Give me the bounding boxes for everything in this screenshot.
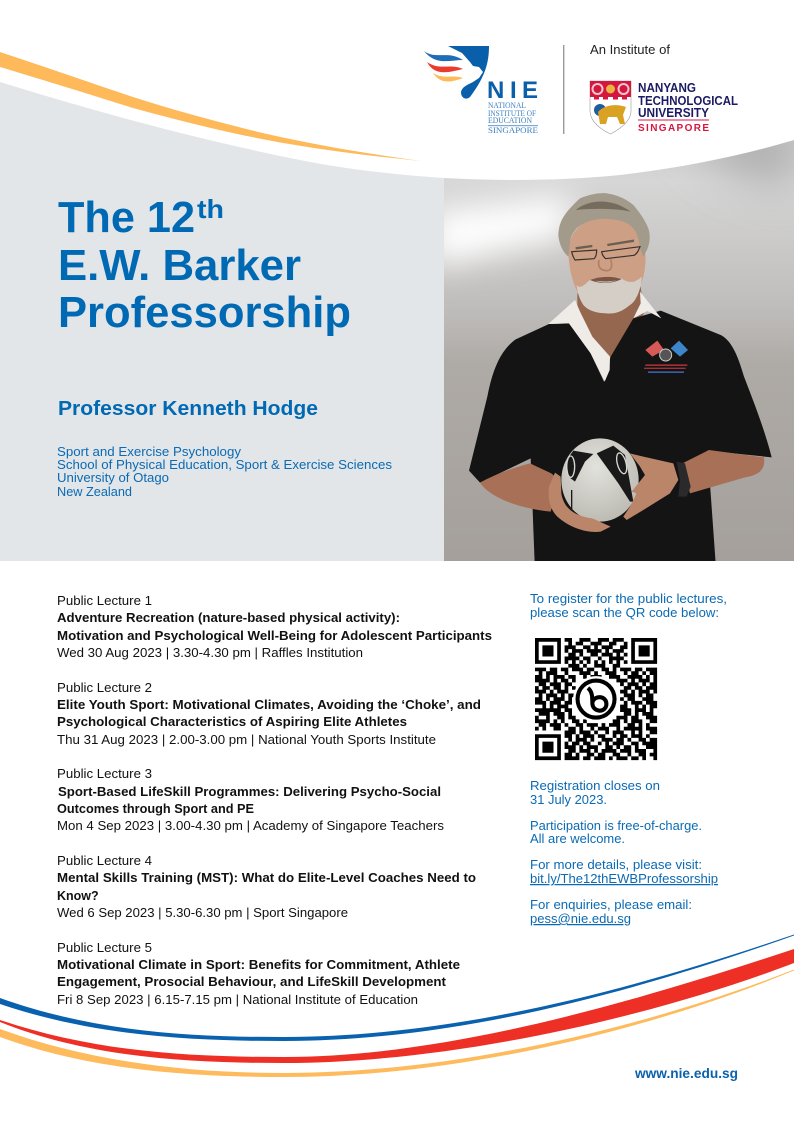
right arm — [682, 450, 764, 493]
red ribbon — [0, 949, 794, 1063]
website: www.nie.edu.sg — [634, 1066, 738, 1081]
public lecture 1 — [57, 594, 492, 660]
public lecture 2: Psychological Characteristics of Aspiring Elite Athletes — [57, 715, 407, 729]
black shirt — [469, 311, 772, 563]
public lecture 4: Mental Skills Training (MST): What do Elite-Level Coaches Need to — [57, 871, 476, 885]
NIE full name — [488, 100, 538, 135]
public lecture 5: Engagement, Prosocial Behaviour, and LifeSkill Development — [57, 975, 447, 989]
nose shadow — [599, 259, 612, 271]
public lecture 3: Public Lecture 3 — [57, 767, 152, 781]
speaker affiliation: School of Physical Education, Sport & Exercise Sciences — [57, 458, 392, 472]
public lecture 3: Mon 4 Sep 2023 | 3.00-4.30 pm | Academy of Singapore Teachers — [57, 819, 444, 833]
public lecture 5: Public Lecture 5 — [57, 941, 152, 955]
speaker affiliation — [57, 445, 392, 499]
public lecture 1: Adventure Recreation (nature-based physical activity): — [57, 611, 400, 625]
gold swoosh top — [0, 52, 421, 161]
logo: NTU — [590, 80, 738, 134]
white top curve — [420, 0, 794, 180]
public lecture 1: Motivation and Psychological Well-Being for Adolescent Participants — [57, 629, 492, 643]
panel: grey title background — [0, 82, 444, 561]
registration prompt: To register for the public lectures, — [530, 592, 727, 606]
public lecture 2: Thu 31 Aug 2023 | 2.00-3.00 pm | National Youth Sports Institute — [57, 733, 436, 747]
registration deadline — [530, 779, 660, 807]
eyebrows — [576, 241, 634, 248]
participation note: Participation is free-of-charge. — [530, 819, 702, 833]
speaker affiliation: University of Otago — [57, 471, 169, 485]
enquiries email — [530, 898, 692, 926]
NIE full name: EDUCATION — [488, 115, 532, 125]
public lecture 4 — [57, 854, 476, 920]
blue ribbon — [0, 934, 794, 1041]
neck — [577, 287, 644, 367]
NIE stripes — [424, 51, 463, 82]
public lecture 5: Fri 8 Sep 2023 | 6.15-7.15 pm | National Institute of Education — [57, 993, 418, 1007]
title — [58, 193, 351, 337]
photo: Professor Kenneth Hodge — [430, 125, 794, 563]
public lecture 3 — [57, 767, 444, 833]
mouth — [590, 277, 622, 283]
registration prompt — [530, 592, 727, 620]
public lecture 5 — [57, 941, 460, 1007]
NIE lion shield — [448, 46, 489, 99]
NTU wordmark: SINGAPORE — [638, 123, 709, 134]
NTU wordmark: UNIVERSITY — [638, 105, 709, 120]
title: Professorship — [58, 288, 351, 337]
man holding rugby ball — [469, 193, 772, 563]
gold ribbon — [0, 970, 794, 1077]
NTU wordmark: TECHNOLOGICAL — [638, 93, 738, 108]
public lecture 2 — [57, 681, 481, 747]
QR centre logo — [573, 676, 619, 722]
title: The 12 — [58, 193, 195, 242]
hands — [549, 453, 678, 532]
NTU wordmark — [638, 80, 738, 134]
NIE full name: SINGAPORE — [488, 125, 538, 135]
registration prompt: please scan the QR code below: — [530, 606, 719, 620]
bottom ribbons — [0, 934, 794, 1077]
face — [568, 218, 646, 293]
speaker name: Professor Kenneth Hodge — [58, 398, 318, 420]
more details link — [530, 858, 718, 886]
public lecture 4: Know? — [57, 889, 99, 903]
NTU shield — [590, 81, 631, 134]
NIE full name: NATIONAL — [488, 100, 526, 110]
public lecture 3: Outcomes through Sport and PE — [57, 802, 254, 816]
more details link: bit.ly/The12thEWBProfessorship — [530, 872, 718, 886]
white collar and undershirt — [548, 292, 661, 382]
logo: NIE — [424, 46, 538, 135]
public lecture 3: Sport-Based LifeSkill Programmes: Delivering Psycho-Social — [58, 785, 441, 799]
speaker affiliation: New Zealand — [57, 485, 132, 499]
hair — [558, 193, 650, 257]
public lecture 2: Elite Youth Sport: Motivational Climates, Avoiding the ‘Choke’, and — [57, 698, 481, 712]
public lecture 1: Public Lecture 1 — [57, 594, 152, 608]
glasses — [572, 247, 640, 260]
more details link: For more details, please visit: — [530, 858, 702, 872]
public lecture 5: Motivational Climate in Sport: Benefits for Commitment, Athlete — [57, 958, 460, 972]
speaker affiliation: Sport and Exercise Psychology — [57, 445, 242, 459]
public lecture 2: Public Lecture 2 — [57, 681, 152, 695]
shirt emblem — [644, 341, 688, 373]
watch — [677, 462, 691, 497]
QR code — [535, 638, 657, 760]
registration deadline: Registration closes on — [530, 779, 660, 793]
rugby ball — [561, 438, 639, 522]
left arm — [480, 463, 559, 512]
NIE wordmark: NIE — [487, 77, 538, 104]
public lecture 4: Wed 6 Sep 2023 | 5.30-6.30 pm | Sport Singapore — [57, 906, 348, 920]
participation note: All are welcome. — [530, 832, 625, 846]
beard — [577, 277, 642, 313]
enquiries email: For enquiries, please email: — [530, 898, 692, 912]
public lecture 4: Public Lecture 4 — [57, 854, 152, 868]
registration deadline: 31 July 2023. — [530, 793, 607, 807]
public lecture 1: Wed 30 Aug 2023 | 3.30-4.30 pm | Raffles Institution — [57, 646, 363, 660]
darker hair top — [576, 201, 631, 212]
text: an institute of: An Institute of — [590, 42, 670, 57]
teeth — [596, 280, 617, 282]
QR finder squares — [535, 638, 657, 760]
NTU wordmark: NANYANG — [638, 80, 696, 95]
enquiries email: pess@nie.edu.sg — [530, 912, 631, 926]
NIE full name: INSTITUTE OF — [488, 108, 536, 118]
title: E.W. Barker — [58, 241, 301, 290]
title: th — [197, 194, 224, 224]
participation note — [530, 819, 702, 846]
photo backdrop — [430, 125, 794, 561]
